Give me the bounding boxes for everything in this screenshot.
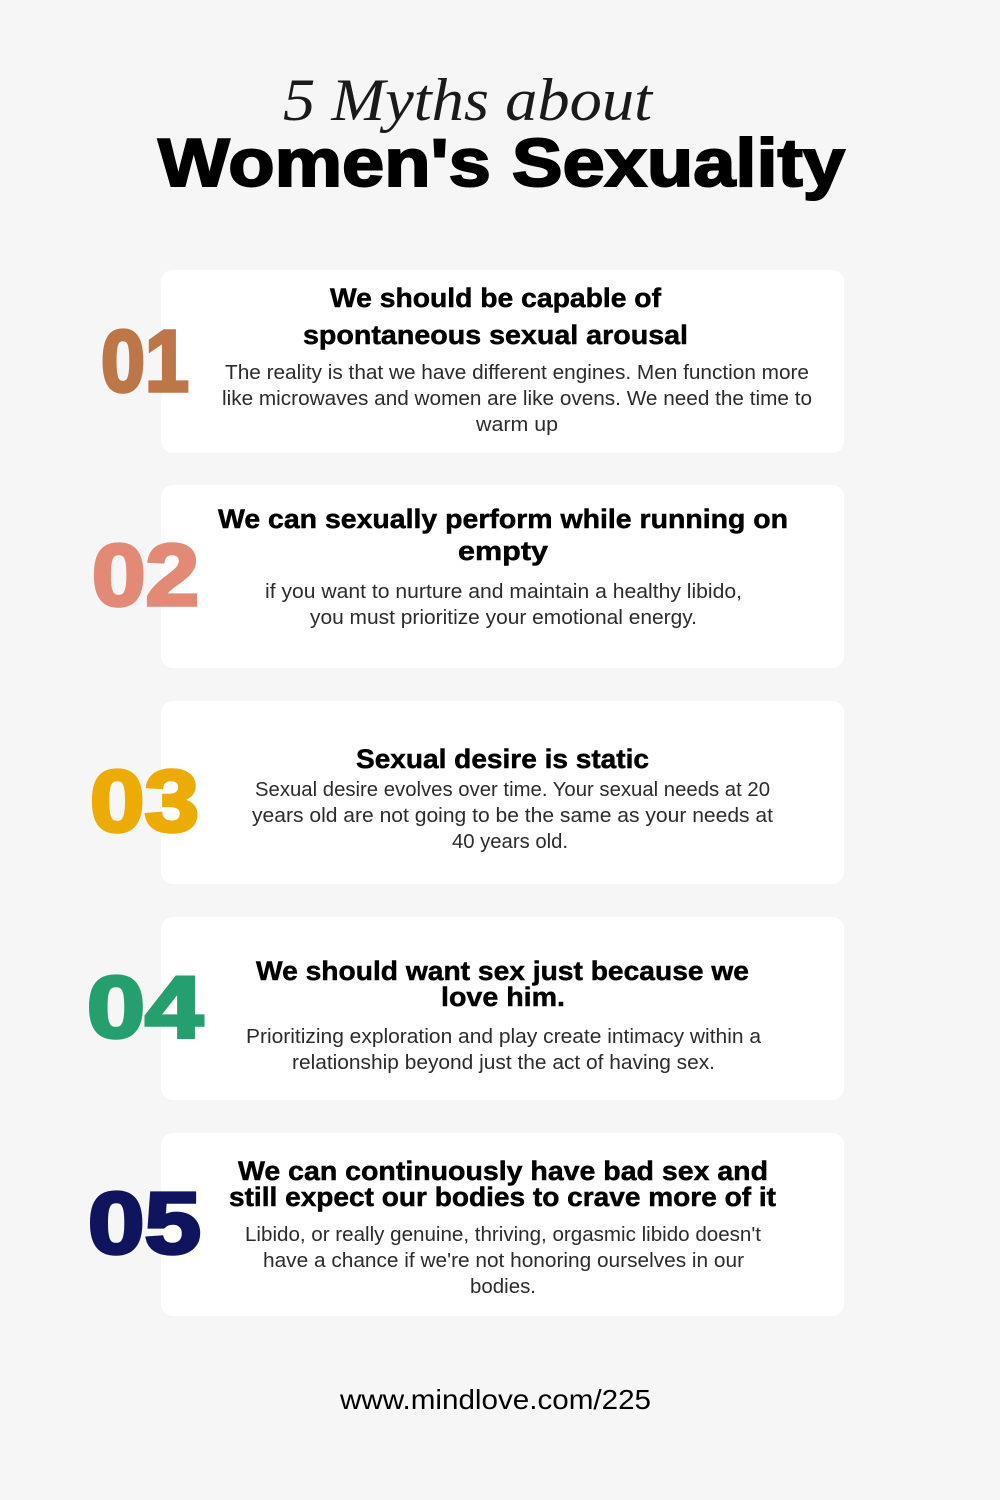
body 3: years old are not going to be the same as your needs at — [252, 805, 773, 827]
panel: myth 5 — [88, 1133, 844, 1316]
heading 2: empty — [458, 536, 548, 566]
heading 4: We should want sex just because we — [256, 956, 749, 986]
footer url: www.mindlove.com/225 — [339, 1384, 651, 1415]
body 5: bodies. — [470, 1276, 536, 1298]
body 3 — [252, 779, 773, 853]
heading 1: spontaneous sexual arousal — [303, 320, 688, 350]
number 03: 03 — [90, 753, 199, 850]
panel: myth 2 — [92, 485, 844, 668]
body 2 — [265, 581, 742, 629]
body 5: have a chance if we're not honoring ourselves in our — [263, 1250, 744, 1272]
title — [158, 67, 845, 201]
body 3: Sexual desire evolves over time. Your sexual needs at 20 — [255, 779, 770, 801]
heading 4 — [256, 956, 749, 1012]
number 04: 04 — [87, 959, 203, 1056]
panel: myth 1 — [101, 270, 844, 453]
body 1 — [222, 362, 812, 436]
heading 1 — [303, 283, 688, 350]
body 1: warm up — [475, 414, 558, 436]
heading 5: still expect our bodies to crave more of it — [229, 1182, 776, 1212]
heading 2 — [218, 504, 788, 566]
body 5 — [245, 1224, 761, 1298]
heading 5: We can continuously have bad sex and — [238, 1156, 768, 1186]
heading 1: We should be capable of — [330, 283, 662, 313]
body 4 — [246, 1026, 762, 1074]
body 3: 40 years old. — [452, 831, 568, 853]
body 1: The reality is that we have different engines. Men function more — [225, 362, 809, 384]
body 4: relationship beyond just the act of having sex. — [292, 1052, 715, 1074]
body 2: you must prioritize your emotional energy. — [310, 607, 697, 629]
panel: myth 4 — [87, 917, 844, 1100]
body 2: if you want to nurture and maintain a healthy libido, — [265, 581, 742, 603]
body 5: Libido, or really genuine, thriving, orgasmic libido doesn't — [245, 1224, 761, 1246]
title script line: 5 Myths about — [283, 67, 653, 133]
number 02: 02 — [92, 527, 199, 624]
panel: myth 3 — [90, 701, 844, 884]
number 01: 01 — [101, 313, 189, 410]
number 05: 05 — [88, 1175, 201, 1272]
heading 3: Sexual desire is static — [356, 744, 649, 774]
body 4: Prioritizing exploration and play create intimacy within a — [246, 1026, 762, 1048]
body 1: like microwaves and women are like ovens. We need the time to — [222, 388, 812, 410]
heading 4: love him. — [441, 982, 565, 1012]
title bold line: Women's Sexuality — [158, 125, 845, 201]
heading 5 — [229, 1156, 776, 1212]
heading 2: We can sexually perform while running on — [218, 504, 788, 534]
